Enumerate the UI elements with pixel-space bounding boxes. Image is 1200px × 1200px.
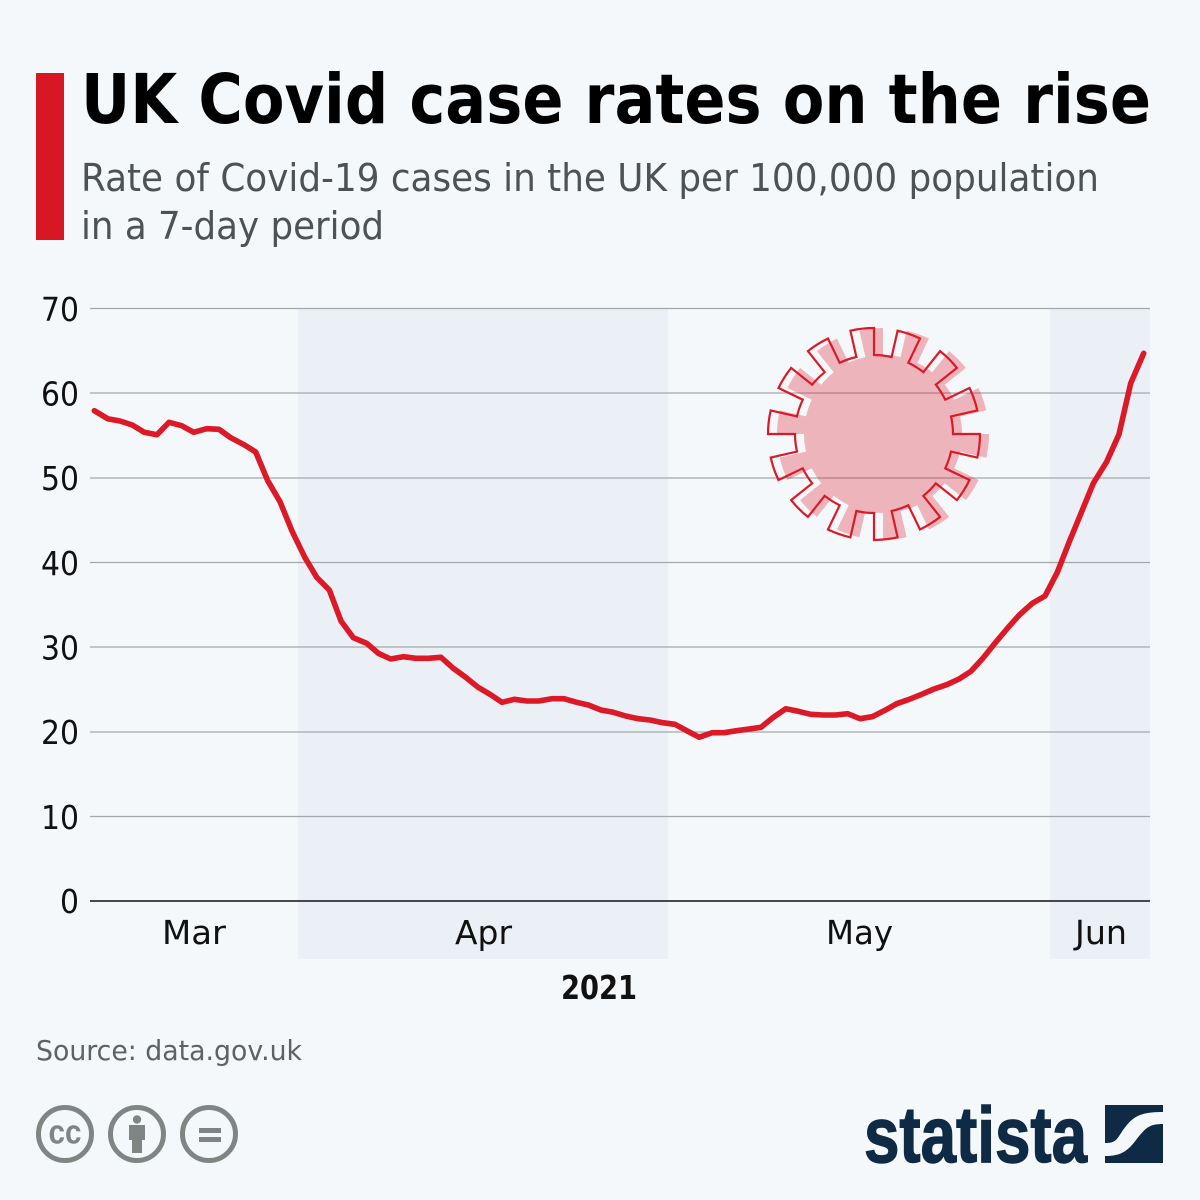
icon: creative commons: cc xyxy=(48,1114,82,1152)
x axis month labels: Mar xyxy=(162,913,226,952)
icon: creative commons xyxy=(38,1108,92,1160)
logo: statista: statista xyxy=(864,1090,1088,1179)
x axis month labels: Jun xyxy=(1073,913,1127,952)
x axis month labels: May xyxy=(826,913,893,952)
y axis labels: 10 xyxy=(41,798,79,837)
icon: no derivatives xyxy=(182,1108,236,1160)
y axis labels xyxy=(41,290,79,921)
x axis year label: 2021 xyxy=(561,968,637,1007)
month bands xyxy=(298,308,1150,959)
x axis month labels xyxy=(162,913,1127,952)
subtitle xyxy=(81,156,1099,248)
red accent bar xyxy=(36,73,64,240)
y axis labels: 30 xyxy=(41,628,79,668)
y axis labels: 60 xyxy=(41,374,79,414)
y axis labels: 0 xyxy=(60,882,79,921)
source: Source: data.gov.uk xyxy=(36,1034,303,1067)
y axis labels: 70 xyxy=(41,290,79,329)
y axis labels: 50 xyxy=(41,459,79,498)
icon: coronavirus xyxy=(768,328,989,540)
subtitle: Rate of Covid-19 cases in the UK per 100,000 population xyxy=(81,156,1099,200)
icon: attribution xyxy=(110,1108,164,1160)
subtitle: in a 7-day period xyxy=(81,204,384,248)
x axis month labels: Apr xyxy=(455,913,512,952)
line chart: case rate xyxy=(94,353,1144,737)
y axis labels: 20 xyxy=(41,713,79,752)
y axis labels: 40 xyxy=(41,544,79,583)
